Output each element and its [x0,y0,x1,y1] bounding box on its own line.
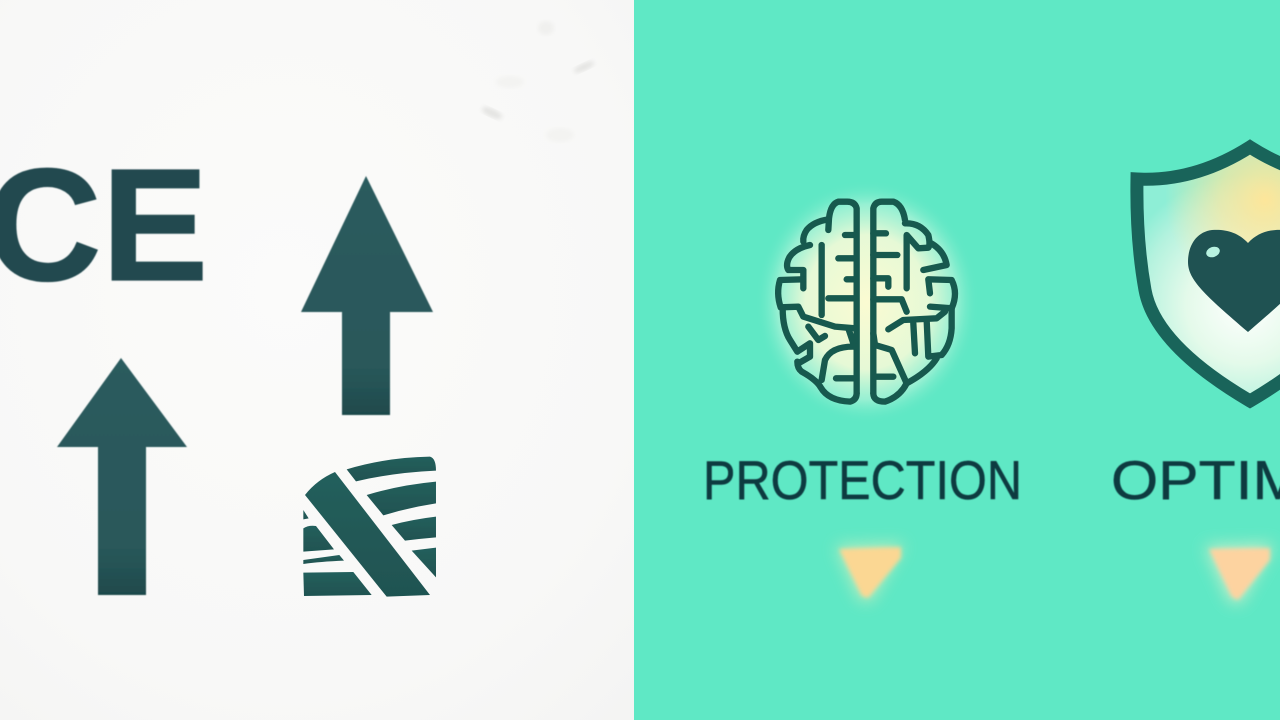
icon: brain [755,180,979,424]
icon: optimization marker triangle [1205,544,1274,604]
arrow: upper up arrow [301,176,433,415]
arrow: lower up arrow [57,358,187,595]
icon: shield with heart [1137,147,1280,401]
icon: woven muscle pattern [303,457,436,597]
icon: heart [1188,230,1280,332]
icon: protection marker triangle [836,544,904,602]
panel: right mint background [634,0,1280,720]
label: protection: PROTECTION [703,449,1022,511]
panel: left paper background [0,0,634,720]
label: optimization, cropped: OPTIM [1111,449,1280,511]
